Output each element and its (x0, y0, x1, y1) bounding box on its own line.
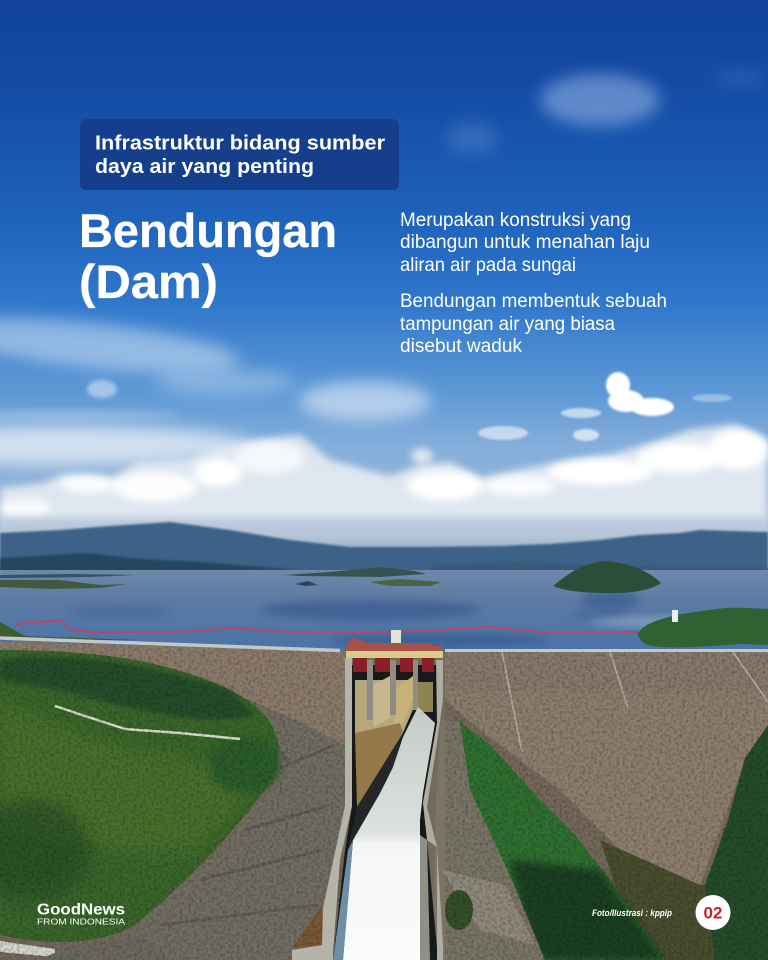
sky (0, 0, 768, 580)
logo: GoodNews from Indonesia (37, 902, 125, 926)
description: reservoir: disebut waduk (400, 335, 522, 357)
water shadow (348, 733, 403, 850)
dam face right (445, 652, 768, 885)
logo: GoodNews from Indonesia: GoodNews (37, 902, 125, 918)
small bright clouds (478, 372, 732, 441)
logo: GoodNews from Indonesia: FROM INDONESIA (37, 916, 125, 926)
page number badge (696, 895, 730, 930)
title: (Dam) (79, 255, 218, 308)
cumulus cloud band (0, 424, 768, 544)
right island (638, 608, 768, 647)
category label box (80, 119, 399, 190)
description: reservoir: tampungan air yang biasa (400, 313, 615, 335)
gatehouse (346, 630, 443, 672)
dam face left (0, 641, 345, 745)
spillway (292, 630, 443, 960)
ground base (0, 641, 768, 960)
rock slope left of spillway (100, 698, 352, 960)
lower right slope (600, 840, 768, 960)
red floating boom (16, 620, 638, 633)
description: definition: aliran air pada sungai (400, 254, 576, 276)
photo credit: Foto/Ilustrasi : kppip (592, 908, 672, 918)
description: definition: dibangun untuk menahan laju (400, 231, 650, 253)
category label text: daya air yang penting (95, 156, 314, 178)
near ridge (0, 553, 300, 574)
bottom left road (0, 941, 55, 957)
concrete panels (355, 680, 417, 735)
green hillside (0, 650, 279, 942)
islands (0, 561, 661, 593)
description: reservoir (400, 290, 667, 357)
description: reservoir: Bendungan membentuk sebuah (400, 290, 667, 312)
dam survey lines (502, 652, 768, 752)
category label text (95, 132, 385, 178)
high wispy clouds (0, 68, 766, 465)
grey channel strip (420, 835, 430, 960)
concrete left wall (292, 658, 352, 960)
category label text: Infrastruktur bidang sumber (95, 132, 385, 154)
reservoir water (0, 570, 768, 652)
texture overlay (0, 641, 768, 960)
channel floor (333, 665, 437, 960)
green slope right of spillway (460, 722, 665, 960)
white hillside road (55, 706, 240, 739)
rock terraces right of spillway (432, 720, 545, 960)
concrete right wall (423, 660, 443, 960)
white spilling water (343, 707, 435, 960)
page number badge: 02 (704, 904, 722, 922)
right edge dark vegetation (705, 725, 768, 960)
left shoreline bank (0, 622, 140, 640)
side sliver of water (333, 840, 353, 960)
concrete apron (355, 723, 403, 807)
title: Bendungan (79, 204, 337, 257)
dam crest road (0, 638, 340, 650)
description: definition: Merupakan konstruksi yang (400, 209, 631, 231)
distant mountains (0, 522, 768, 575)
title (79, 204, 337, 308)
piers (367, 660, 418, 720)
description: definition (400, 209, 650, 276)
